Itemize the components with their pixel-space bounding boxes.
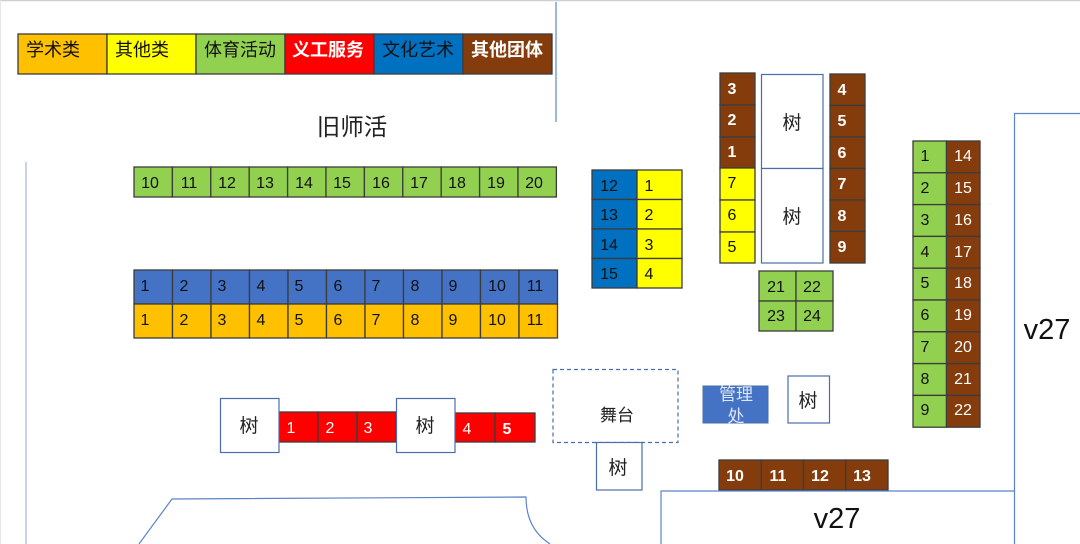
legend: activity categories (18, 34, 552, 74)
tree: 树 (239, 415, 259, 437)
booth column: brown 14-22: 19 (954, 307, 972, 324)
building: v27 right: v27 (1024, 314, 1070, 346)
management office: 管理 (719, 385, 753, 404)
booth block: yellow 1-4: 1 (645, 178, 654, 195)
legend item: 学术类 (18, 34, 107, 74)
booth row: brown 10-13: 10 (726, 468, 744, 485)
booth row: blue 1-11: 3 (218, 278, 227, 295)
booth block: yellow 1-4: 2 (645, 207, 654, 224)
booth row: amber 1-11 (134, 304, 558, 338)
booth row: blue 1-11: 11 (527, 278, 543, 295)
booth column: brown 14-22: 16 (954, 212, 972, 229)
booth column: brown 14-22: 14 (954, 148, 972, 165)
booth row: brown 10-13: 13 (853, 468, 871, 485)
booth column: yellow 7,6,5 (720, 168, 755, 263)
booth row: blue 1-11: 1 (141, 278, 150, 295)
booth row: blue 1-11: 8 (411, 278, 420, 295)
booth row: brown 10-13 (719, 460, 888, 490)
booth row: red 1-3: 3 (364, 420, 373, 437)
booth row: blue 1-11: 5 (295, 278, 304, 295)
stage (553, 370, 678, 442)
building: v27 bottom: v27 (814, 503, 860, 535)
booth block: green 21-24: 24 (803, 308, 821, 325)
booth column: brown 4-9: 8 (838, 208, 847, 225)
booth row: amber 1-11: 11 (527, 312, 543, 329)
booth row: amber 1-11: 1 (141, 312, 150, 329)
booth row: brown 10-13: 12 (811, 468, 829, 485)
booth column: green 1-9: 2 (921, 180, 930, 197)
tree: 树 (608, 457, 628, 479)
booth row: red 4-5: 5 (503, 421, 512, 438)
legend item: 其他类: 其他类 (115, 40, 169, 60)
management office (703, 385, 768, 426)
booth column: yellow 7,6,5: 7 (728, 175, 737, 192)
booth block: yellow 1-4 (637, 170, 682, 288)
booth column: brown 14-22: 21 (954, 371, 972, 388)
booth row: red 1-3: 2 (326, 420, 335, 437)
booth column: green 1-9: 8 (921, 371, 930, 388)
booth row: blue 1-11: 7 (372, 278, 381, 295)
booth block: green 21-24 (759, 271, 833, 331)
tree: 树 (782, 206, 802, 228)
tree (762, 168, 823, 263)
booth row: blue 1-11: 4 (257, 278, 266, 295)
booth row: blue 1-11: 2 (180, 278, 189, 295)
tree (220, 398, 279, 452)
booth row: red 4-5: 4 (463, 421, 472, 438)
booth column: green 1-9 (913, 141, 946, 427)
booth column: green 1-9: 1 (921, 148, 930, 165)
legend item: 学术类: 学术类 (26, 40, 80, 60)
booth row: green 10-20: 16 (372, 175, 390, 192)
tree: 树 (782, 112, 802, 134)
booth block: culture 12-15: 15 (600, 266, 618, 283)
booth column: brown 3,2,1: 2 (728, 112, 737, 129)
booth row: amber 1-11: 9 (449, 312, 458, 329)
booth block: culture 12-15 (592, 170, 637, 288)
stage: 舞台 (600, 406, 634, 425)
booth row: blue 1-11: 6 (334, 278, 343, 295)
heading: 旧师活: 旧师活 (317, 114, 387, 140)
legend item: 体育活动: 体育活动 (204, 40, 276, 60)
booth row: amber 1-11: 10 (488, 312, 506, 329)
booth row: green 10-20: 17 (410, 175, 428, 192)
booth column: green 1-9: 4 (921, 244, 930, 261)
booth row: amber 1-11: 2 (180, 312, 189, 329)
booth row: green 10-20: 19 (487, 175, 505, 192)
tree (396, 398, 455, 452)
booth row: amber 1-11: 4 (257, 312, 266, 329)
booth column: brown 4-9: 5 (838, 113, 847, 130)
booth block: yellow 1-4: 4 (645, 266, 654, 283)
legend item: 义工服务: 义工服务 (292, 40, 364, 60)
tree (762, 74, 823, 168)
booth row: red 1-3 (279, 412, 396, 442)
legend item: 其他团体: 其他团体 (471, 40, 543, 60)
tree (788, 376, 830, 423)
booth row: green 10-20: 14 (295, 175, 313, 192)
legend item: 文化艺术 (374, 34, 463, 74)
booth row: red 1-3: 1 (287, 420, 296, 437)
booth row: blue 1-11: 9 (449, 278, 458, 295)
booth row: amber 1-11: 3 (218, 312, 227, 329)
booth row: green 10-20: 15 (333, 175, 351, 192)
booth row: amber 1-11: 8 (411, 312, 420, 329)
booth row: amber 1-11: 7 (372, 312, 381, 329)
booth column: brown 3,2,1: 3 (728, 81, 737, 98)
booth row: green 10-20: 20 (525, 175, 543, 192)
booth row: red 4-5 (455, 413, 535, 442)
management office: 处 (728, 407, 744, 426)
booth row: green 10-20: 10 (141, 175, 159, 192)
legend item: 文化艺术: 文化艺术 (382, 40, 454, 60)
tree: 树 (415, 415, 435, 437)
booth row: green 10-20: 11 (181, 175, 197, 192)
tree: 树 (798, 390, 818, 412)
booth column: brown 4-9: 9 (838, 239, 847, 256)
booth row: green 10-20: 13 (256, 175, 274, 192)
booth block: culture 12-15: 12 (600, 178, 618, 195)
booth column: brown 4-9: 7 (838, 176, 847, 193)
building: v27 right (1014, 114, 1080, 544)
legend item: 其他团体 (463, 34, 552, 74)
booth row: green 10-20 (134, 167, 556, 197)
map outlines: building walls and road (26, 2, 556, 544)
booth row: brown 10-13: 11 (770, 468, 787, 485)
legend item: 其他类 (107, 34, 196, 74)
booth row: blue 1-11 (134, 270, 558, 304)
booth column: brown 14-22: 17 (954, 244, 972, 261)
booth column: brown 3,2,1 (720, 73, 755, 168)
legend item: 体育活动 (196, 34, 285, 74)
booth column: brown 14-22: 15 (954, 180, 972, 197)
booth column: brown 4-9: 6 (838, 145, 847, 162)
booth column: brown 14-22 (946, 141, 980, 427)
booth row: amber 1-11: 5 (295, 312, 304, 329)
booth column: green 1-9: 9 (921, 402, 930, 419)
booth block: green 21-24: 22 (803, 279, 821, 296)
booth row: green 10-20: 18 (448, 175, 466, 192)
booth column: brown 4-9 (830, 74, 865, 263)
booth block: green 21-24: 21 (767, 279, 785, 296)
booth column: yellow 7,6,5: 5 (728, 239, 737, 256)
booth block: green 21-24: 23 (767, 308, 785, 325)
booth row: green 10-20: 12 (218, 175, 236, 192)
booth column: brown 4-9: 4 (838, 82, 847, 99)
booth block: culture 12-15: 13 (600, 207, 618, 224)
booth block: yellow 1-4: 3 (645, 237, 654, 254)
booth column: brown 14-22: 20 (954, 339, 972, 356)
booth block: culture 12-15: 14 (600, 237, 618, 254)
booth column: brown 14-22: 18 (954, 275, 972, 292)
booth column: brown 14-22: 22 (954, 402, 972, 419)
booth row: amber 1-11: 6 (334, 312, 343, 329)
legend item: 义工服务 (285, 34, 374, 74)
booth row: blue 1-11: 10 (488, 278, 506, 295)
tree (596, 442, 642, 490)
booth column: brown 3,2,1: 1 (728, 144, 737, 161)
booth column: green 1-9: 7 (921, 339, 930, 356)
booth column: green 1-9: 6 (921, 307, 930, 324)
booth column: green 1-9: 5 (921, 275, 930, 292)
booth column: yellow 7,6,5: 6 (728, 207, 737, 224)
booth column: green 1-9: 3 (921, 212, 930, 229)
building: v27 bottom (661, 491, 1014, 544)
